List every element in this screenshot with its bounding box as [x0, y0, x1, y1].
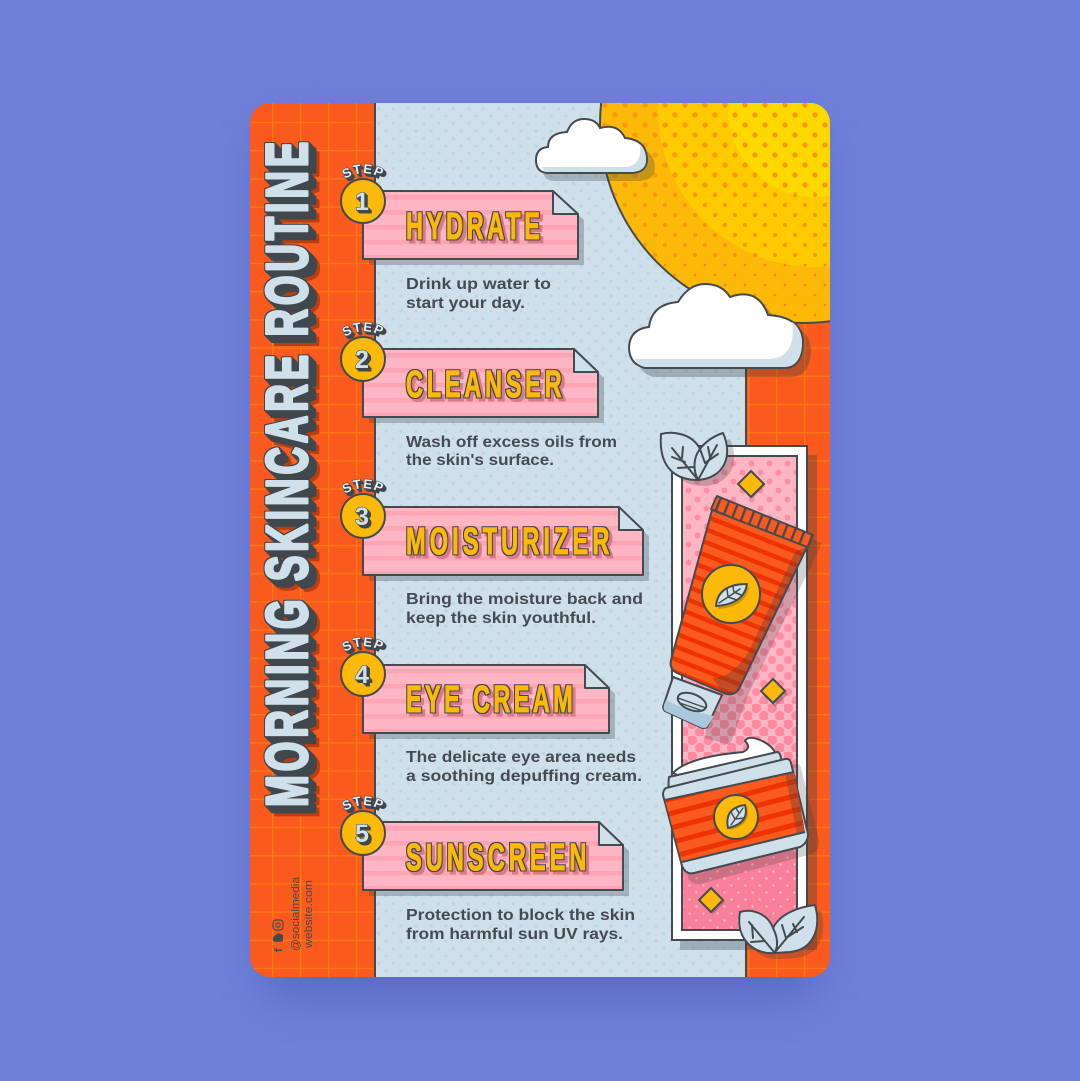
badge: step 3	[340, 478, 386, 539]
icon: diamond middle	[761, 679, 788, 707]
step 1	[340, 164, 584, 312]
heading: eye cream: EYE CREAM	[406, 677, 573, 720]
text: hydrate description	[406, 276, 551, 312]
panel: product frame	[672, 446, 817, 950]
heading: hydrate: HYDRATE	[406, 204, 540, 247]
heading: cleanser: CLEANSER	[406, 362, 562, 405]
card shadow	[262, 125, 818, 997]
text: hydrate description: start your day.	[406, 295, 525, 312]
leaves: top	[661, 433, 734, 486]
text: moisturizer description: Bring the moisture back and	[406, 591, 643, 608]
product: tube	[663, 496, 822, 745]
jar label with leaf	[714, 795, 758, 839]
text: cleanser description	[406, 434, 617, 469]
text: cleanser description: Wash off excess oils from	[406, 434, 617, 451]
icon: diamond top	[738, 471, 765, 498]
text: eye cream description: The delicate eye area needs	[406, 749, 636, 766]
step 3	[340, 478, 649, 627]
text: social handle: @socialmedia	[290, 876, 302, 951]
heading: sunscreen: SUNSCREEN	[406, 835, 586, 878]
badge: step 3: 3	[355, 503, 369, 531]
badge: step 2: STEP	[342, 322, 386, 340]
badge: step 2	[340, 322, 386, 382]
text: eye cream description	[406, 749, 642, 785]
step 5	[340, 796, 635, 943]
jar cream	[673, 738, 776, 785]
tube cap	[663, 677, 722, 728]
step 4	[340, 636, 642, 785]
text: sunscreen description: Protection to block the skin	[406, 907, 635, 924]
badge: step 1: 1	[355, 188, 369, 216]
tube crimp	[711, 496, 813, 549]
badge: step 1	[340, 164, 386, 224]
text: eye cream description: a soothing depuffing cream.	[406, 768, 642, 785]
icon: facebook: f	[273, 948, 285, 952]
leaves: bottom	[739, 905, 823, 959]
badge: step 2: 2	[355, 346, 369, 374]
ribbon: cleanser	[363, 349, 604, 423]
social handles	[273, 876, 315, 952]
icon: instagram	[273, 920, 283, 930]
jar lid ring	[668, 752, 782, 790]
icon: diamond bottom	[699, 888, 725, 914]
cloud: small top	[536, 119, 655, 181]
badge: step 4: STEP	[342, 636, 386, 654]
ribbon: sunscreen	[363, 822, 629, 896]
text: website: website.com	[303, 880, 315, 949]
jar body	[663, 759, 808, 873]
tube label with leaf	[702, 565, 760, 623]
heading: moisturizer: MOISTURIZER	[406, 519, 609, 562]
step 2	[340, 322, 617, 469]
badge: step 4	[340, 636, 386, 697]
panel: orange background with grid	[250, 103, 830, 977]
badge: step 5: STEP	[342, 796, 386, 814]
icon: twitter	[273, 934, 283, 942]
text: moisturizer description: keep the skin youthful.	[406, 610, 596, 627]
badge: step 5: 5	[355, 820, 369, 848]
badge: step 4: 4	[355, 661, 369, 689]
badge: step 5	[340, 796, 386, 856]
ribbon: eye cream	[363, 665, 615, 739]
badge: step 3: STEP	[342, 478, 386, 496]
product: cream jar	[663, 738, 819, 884]
text: cleanser description: the skin's surface.	[406, 452, 554, 469]
text: moisturizer description	[406, 591, 643, 627]
ribbon: moisturizer	[363, 507, 649, 581]
text: sunscreen description	[406, 907, 635, 943]
title: MORNING SKINCARE ROUTINE	[256, 142, 320, 807]
cloud: large	[629, 284, 811, 377]
sun	[599, 103, 830, 324]
text: sunscreen description: from harmful sun UV rays.	[406, 926, 623, 943]
tube body	[671, 510, 807, 694]
panel: light blue dotted centre	[375, 100, 746, 980]
badge: step 1: STEP	[342, 164, 386, 182]
ribbon: hydrate	[363, 191, 584, 265]
text: hydrate description: Drink up water to	[406, 276, 551, 293]
card	[250, 103, 830, 977]
